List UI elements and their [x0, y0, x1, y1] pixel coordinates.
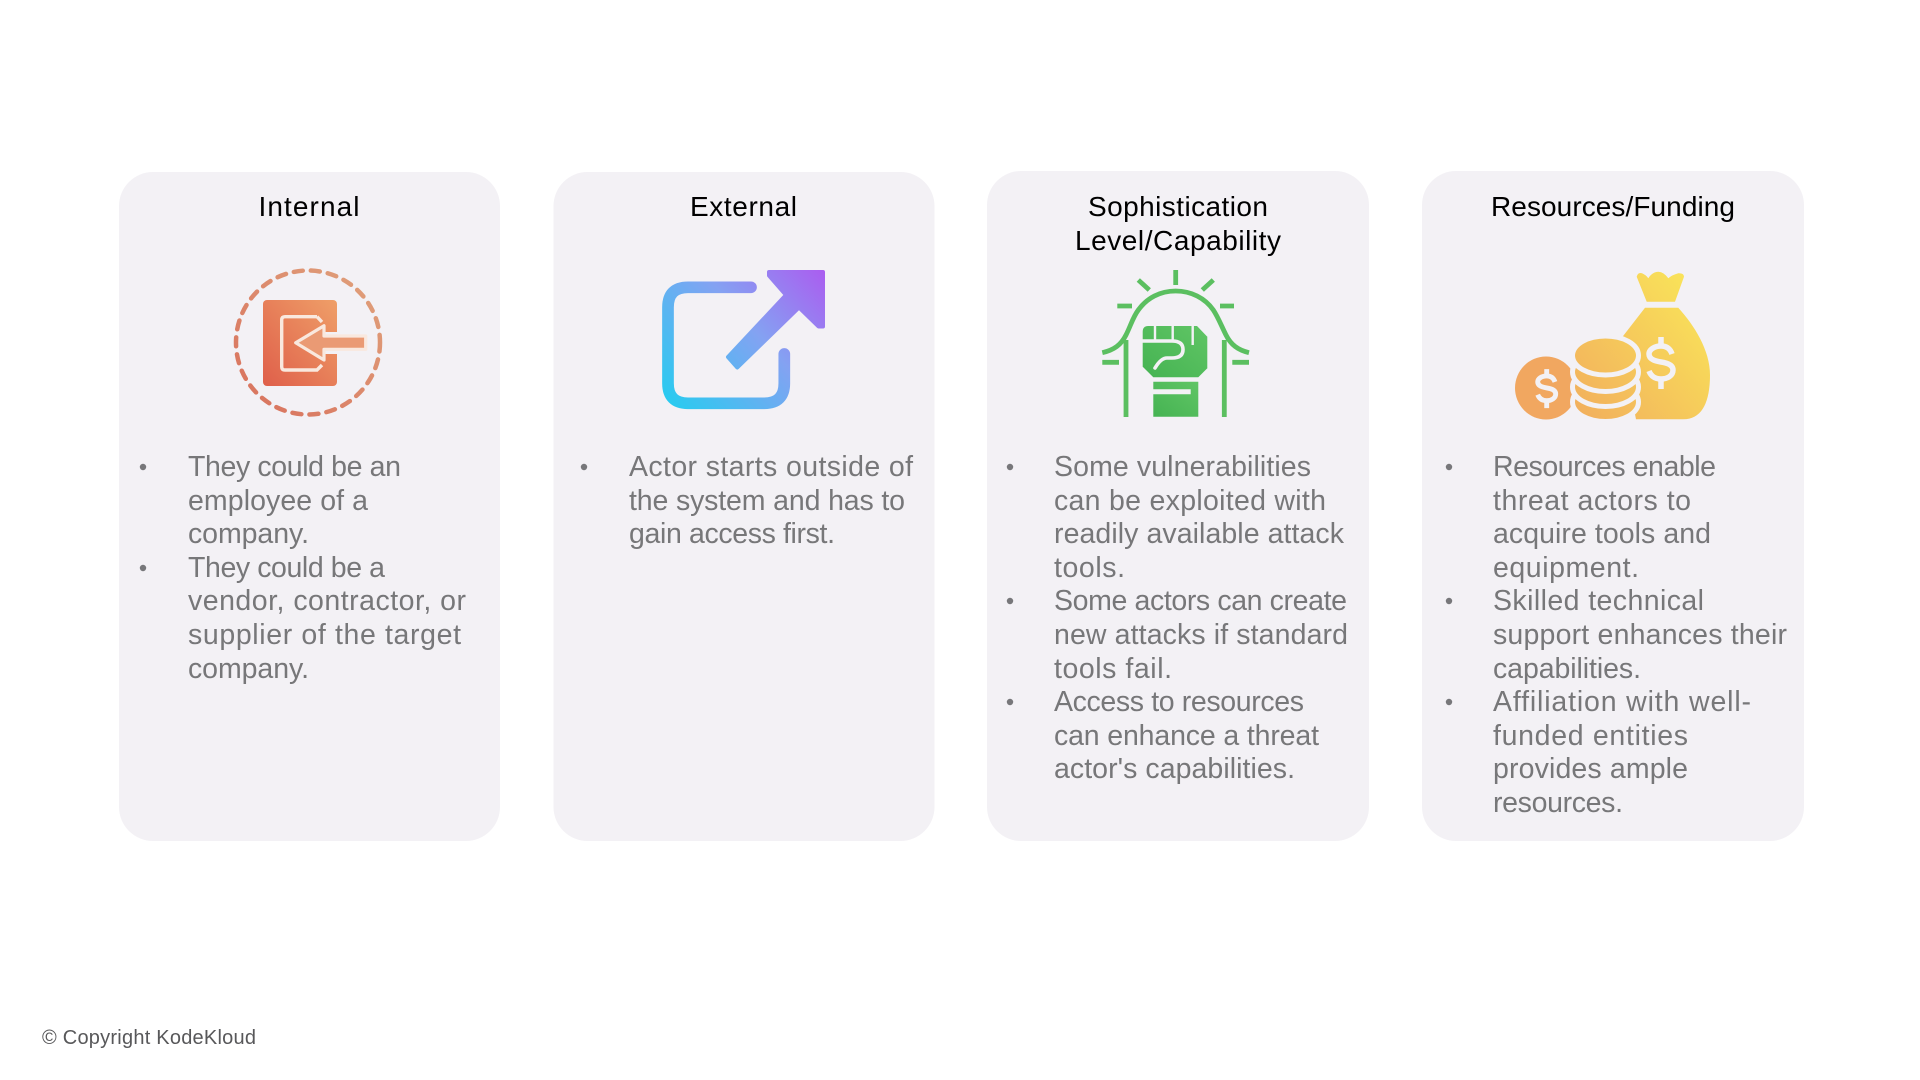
bullet list: internal: supplier of the target: [188, 619, 461, 651]
heading: internal: Internal: [258, 191, 360, 222]
panel: internal: [119, 172, 500, 841]
bullet list: external: the system and has to: [629, 485, 905, 517]
heading: external: External: [690, 191, 797, 222]
bullet list: sophistication: can be exploited with: [1054, 485, 1326, 517]
bullet list: resources/funding: Affiliation with well-: [1493, 686, 1751, 718]
icon: raised fist: [1102, 270, 1249, 417]
icon: dashed circle with entry arrow: [236, 270, 380, 414]
panel: external: [554, 172, 934, 841]
heading: sophistication level/capability: [1075, 191, 1281, 256]
bullet list: sophistication: tools fail.: [1054, 653, 1172, 685]
bullet list: internal: vendor, contractor, or: [188, 585, 466, 617]
bullet list: sophistication: Access to resources: [1054, 686, 1304, 718]
bullet list: sophistication: can enhance a threat: [1054, 720, 1319, 752]
bullet list: internal: company.: [188, 518, 309, 550]
heading: resources/funding: Resources/Funding: [1491, 191, 1735, 222]
bullet list: resources/funding: funded entities: [1493, 720, 1688, 752]
panel: sophistication level/capability: [987, 171, 1369, 841]
bullet list: external: gain access first.: [629, 518, 835, 550]
bullet list: resources/funding: Resources enable: [1493, 451, 1716, 483]
icon: external link arrow: [668, 272, 823, 403]
bullet list: resources/funding: Skilled technical: [1493, 585, 1704, 617]
bullet list: internal: They could be an: [188, 451, 401, 483]
bullet list: resources/funding: threat actors to: [1493, 485, 1691, 517]
panel: resources/funding: [1422, 171, 1804, 841]
bullet list: sophistication: actor's capabilities.: [1054, 753, 1295, 785]
bullet list: sophistication: tools.: [1054, 552, 1125, 584]
bullet list: resources/funding: support enhances their: [1493, 619, 1788, 651]
bullet list: internal: employee of a: [188, 485, 368, 517]
bullet list: sophistication: [1007, 451, 1348, 785]
bullet list: sophistication: Some actors can create: [1054, 585, 1347, 617]
heading: sophistication level/capability: Level/Capability: [1075, 225, 1281, 256]
bullet list: sophistication: Some vulnerabilities: [1054, 451, 1311, 483]
bullet list: sophistication: new attacks if standard: [1054, 619, 1348, 651]
bullet list: resources/funding: resources.: [1493, 787, 1623, 819]
bullet list: resources/funding: provides ample: [1493, 753, 1688, 785]
bullet list: internal: company.: [188, 653, 309, 685]
bullet list: external: Actor starts outside of: [629, 451, 913, 483]
bullet list: resources/funding: [1446, 451, 1788, 819]
bullet list: sophistication: readily available attack: [1054, 518, 1345, 550]
bullet list: external: [581, 451, 913, 550]
icon: money bag and coins: [1515, 272, 1710, 420]
copyright footer: © Copyright KodeKloud: [42, 1027, 256, 1049]
heading: sophistication level/capability: Sophistication: [1088, 191, 1268, 222]
bullet list: internal: They could be a: [188, 552, 385, 584]
bullet list: internal: [140, 451, 467, 685]
bullet list: resources/funding: acquire tools and: [1493, 518, 1711, 550]
bullet list: resources/funding: equipment.: [1493, 552, 1639, 584]
bullet list: resources/funding: capabilities.: [1493, 653, 1641, 685]
